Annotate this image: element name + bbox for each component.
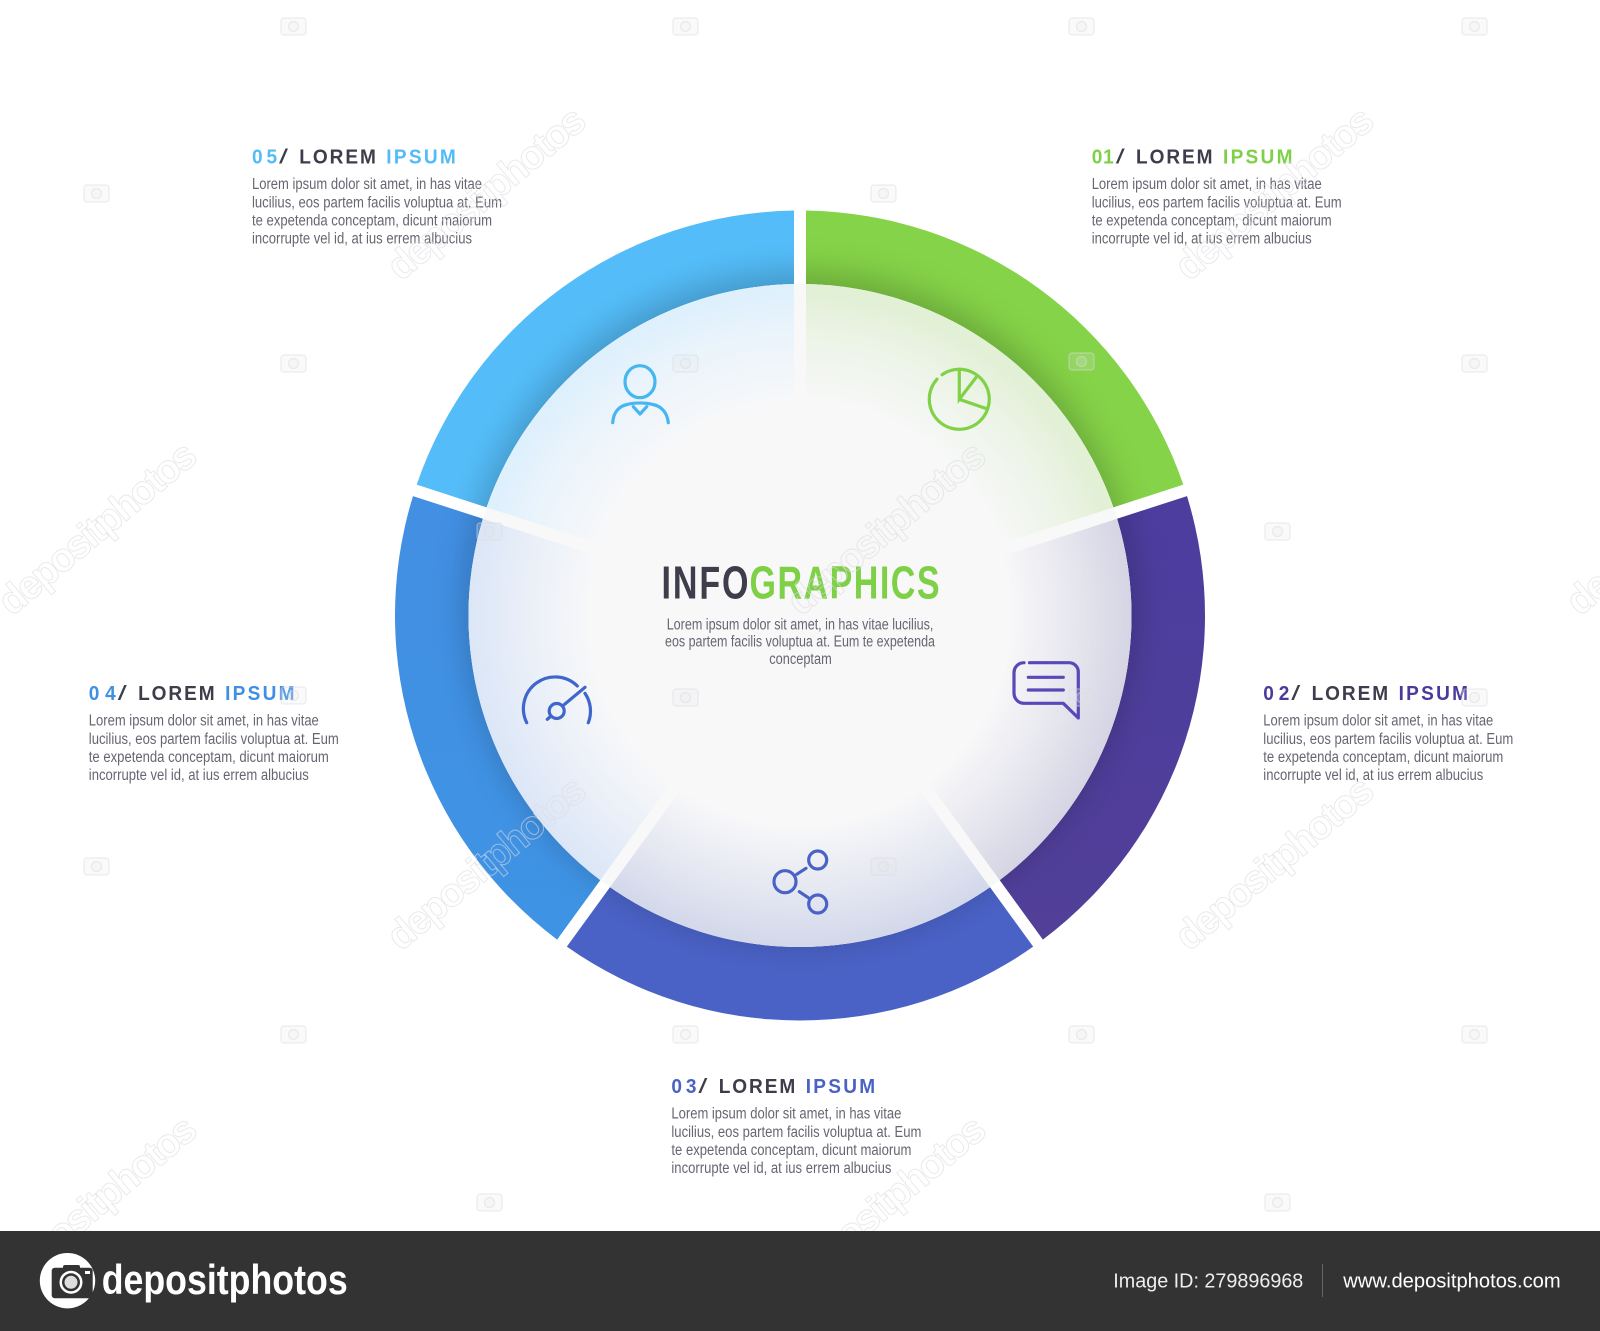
body 04: lucilius, eos partem facilis voluptua at. Eum xyxy=(89,731,339,748)
icon: share nodes xyxy=(774,851,827,913)
heading 05 xyxy=(252,145,456,168)
body 04: Lorem ipsum dolor sit amet, in has vitae xyxy=(89,713,319,730)
body 03 xyxy=(671,1106,921,1177)
watermark text overlay: depositphotos xyxy=(1167,98,1382,289)
text block 05 xyxy=(252,145,502,248)
heading 05: LOREM xyxy=(299,146,376,168)
heading 04: LOREM xyxy=(138,682,215,705)
heading 04 xyxy=(89,682,295,705)
center description: Lorem ipsum dolor sit amet, in has vitae lucilius, xyxy=(667,616,933,633)
heading 04: 04 xyxy=(89,682,116,705)
body 04: te expetenda conceptam, dicunt maiorum xyxy=(89,749,329,766)
segment 03: indigo blue xyxy=(567,887,1033,1020)
body 03: Lorem ipsum dolor sit amet, in has vitae xyxy=(671,1106,901,1123)
heading 03: 03 xyxy=(671,1075,697,1098)
text block 03 xyxy=(671,1075,921,1177)
heading 01: IPSUM xyxy=(1223,146,1292,168)
watermark text overlay: depositphotos xyxy=(779,433,994,624)
body 04: incorrupte vel id, at ius errem albucius xyxy=(89,767,309,784)
icon: person xyxy=(613,366,668,423)
watermark text overlay: depositphotos xyxy=(779,1107,994,1298)
heading 02 xyxy=(1263,682,1468,705)
center description xyxy=(665,616,935,668)
center title: INFO xyxy=(662,556,749,609)
body 03: te expetenda conceptam, dicunt maiorum xyxy=(671,1142,911,1159)
body 03: incorrupte vel id, at ius errem albucius xyxy=(671,1160,892,1177)
center title: GRAPHICS xyxy=(750,556,940,609)
donut ring with five segments xyxy=(395,211,1205,1020)
heading 03: IPSUM xyxy=(806,1075,875,1098)
icon: depositphotos camera logo xyxy=(40,1253,95,1308)
image id: Image ID: 279896968 xyxy=(1113,1271,1303,1293)
text block 02 xyxy=(1263,682,1513,784)
body 05: te expetenda conceptam, dicunt maiorum xyxy=(252,212,492,229)
heading 04: / xyxy=(118,682,127,705)
central disc with tinted wedges xyxy=(468,284,1132,947)
body 01: lucilius, eos partem facilis voluptua at. Eum xyxy=(1092,194,1342,211)
icon: pie chart xyxy=(929,369,989,429)
heading 05: 05 xyxy=(252,146,277,168)
heading 01: 01 xyxy=(1092,146,1114,168)
segment 02: purple xyxy=(1000,496,1205,940)
inner shadow cast on ring xyxy=(464,271,1136,943)
body 01: te expetenda conceptam, dicunt maiorum xyxy=(1092,212,1332,229)
center description: eos partem facilis voluptua at. Eum te expetenda xyxy=(665,634,935,651)
body 02 xyxy=(1263,713,1513,784)
body 02: incorrupte vel id, at ius errem albucius xyxy=(1263,767,1483,784)
watermark text overlay: depositphotos xyxy=(379,98,594,289)
watermark text overlay: depositphotos xyxy=(1167,768,1382,959)
center description: conceptam xyxy=(769,651,832,668)
body 01 xyxy=(1092,176,1342,248)
text block 04 xyxy=(89,682,339,784)
body 05 xyxy=(252,176,502,248)
heading 01 xyxy=(1092,145,1292,168)
footer bar xyxy=(0,1231,1600,1331)
body 05: lucilius, eos partem facilis voluptua at. Eum xyxy=(252,194,502,211)
brand name: depositphotos xyxy=(102,1256,348,1303)
heading 02: LOREM xyxy=(1312,682,1388,705)
watermark text overlay: depositphotos xyxy=(379,768,594,959)
body 03: lucilius, eos partem facilis voluptua at. Eum xyxy=(671,1124,921,1141)
icon: chat bubble xyxy=(1014,663,1078,718)
segment 04: medium blue xyxy=(395,496,600,940)
body 05: Lorem ipsum dolor sit amet, in has vitae xyxy=(252,176,482,193)
body 04 xyxy=(89,713,339,784)
heading 02: 02 xyxy=(1263,682,1289,705)
heading 03: / xyxy=(698,1075,708,1098)
heading 01: LOREM xyxy=(1136,146,1213,168)
watermark camera marks xyxy=(84,18,1487,1211)
center title xyxy=(662,556,940,609)
heading 03 xyxy=(671,1075,875,1098)
heading 04: IPSUM xyxy=(225,682,295,705)
segment 05: light blue xyxy=(417,211,794,507)
heading 02: / xyxy=(1291,682,1301,705)
website url: www.depositphotos.com xyxy=(1342,1271,1561,1293)
heading 05: / xyxy=(279,145,288,168)
heading 02: IPSUM xyxy=(1399,682,1468,705)
body 02: te expetenda conceptam, dicunt maiorum xyxy=(1263,749,1503,766)
body 02: Lorem ipsum dolor sit amet, in has vitae xyxy=(1263,713,1493,730)
heading 01: / xyxy=(1116,145,1125,168)
body 02: lucilius, eos partem facilis voluptua at. Eum xyxy=(1263,731,1513,748)
heading 03: LOREM xyxy=(719,1075,795,1098)
body 05: incorrupte vel id, at ius errem albucius xyxy=(252,230,472,248)
segment 01: green xyxy=(806,211,1183,507)
heading 05: IPSUM xyxy=(386,146,456,168)
body 01: incorrupte vel id, at ius errem albucius xyxy=(1092,230,1312,248)
text block 01 xyxy=(1092,145,1342,248)
body 01: Lorem ipsum dolor sit amet, in has vitae xyxy=(1092,176,1322,193)
icon: speedometer gauge xyxy=(523,677,590,723)
